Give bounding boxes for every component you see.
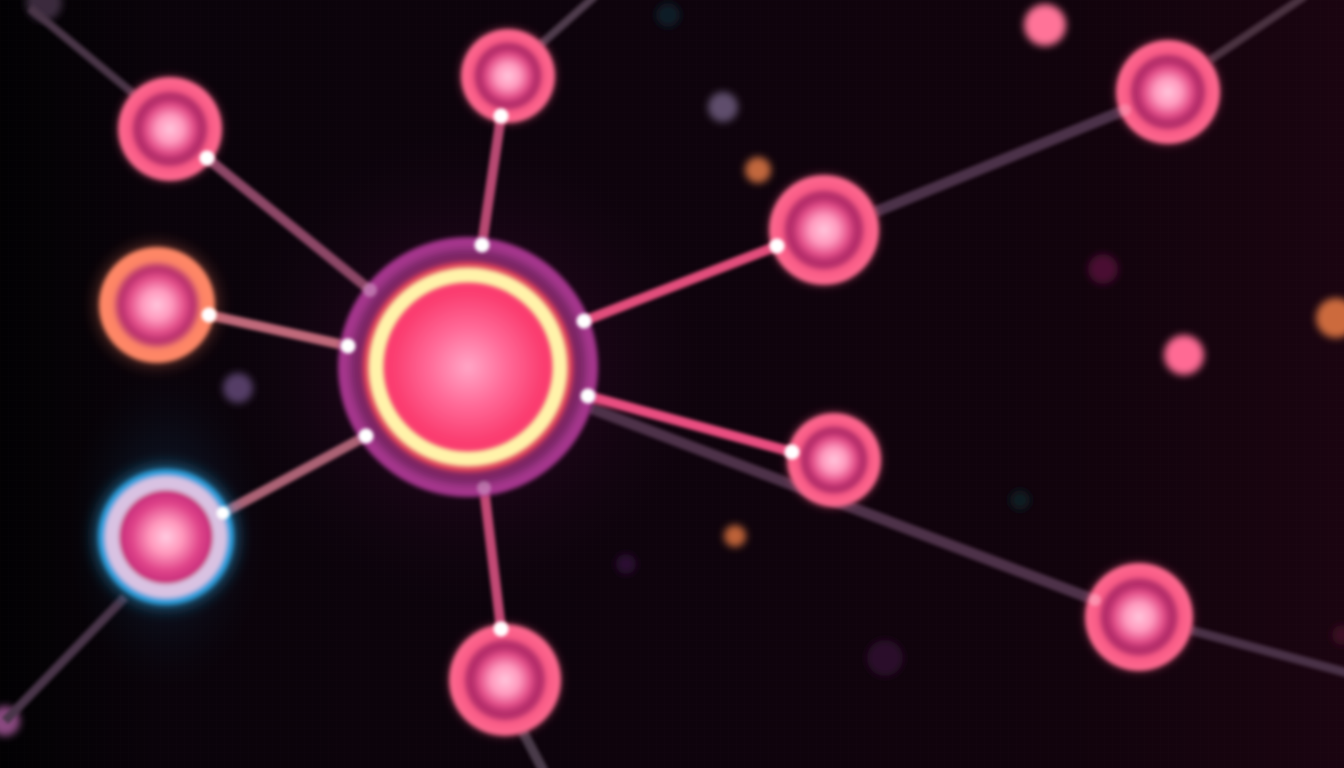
satellite node: orange bbox=[95, 243, 219, 367]
hub yellow ring bbox=[376, 275, 560, 459]
line: blue to hub bbox=[223, 436, 366, 513]
particle: dim teal top bbox=[656, 3, 680, 27]
line: lower right to edge bbox=[1190, 630, 1344, 673]
line: bottom left bbox=[5, 597, 125, 721]
particle: orange lower bbox=[724, 525, 746, 547]
particle: orange right edge bbox=[1316, 298, 1344, 338]
satellite node: upper left bbox=[110, 69, 230, 189]
line: right node to top-right node bbox=[875, 110, 1125, 212]
line: top to hub bbox=[482, 116, 501, 245]
hub node bbox=[338, 237, 598, 497]
satellite node: right upper bbox=[761, 167, 887, 293]
particle: orange upper bbox=[745, 157, 771, 183]
particle: magenta dim bbox=[1088, 254, 1118, 284]
particle: grey bbox=[708, 92, 738, 122]
blue glow behind left node bbox=[66, 370, 266, 690]
hub yellow ring glow bbox=[376, 275, 560, 459]
particle: dim purple bbox=[867, 640, 903, 676]
line: bottom off canvas bbox=[522, 730, 544, 768]
particle: right edge dim bbox=[1332, 625, 1344, 645]
particle: dim purple small bbox=[616, 554, 636, 574]
satellite node: right lower bbox=[779, 405, 889, 515]
satellite node: blue ringed bbox=[94, 465, 238, 609]
line: upper left to hub bbox=[207, 158, 370, 290]
line: bottom to hub bbox=[484, 488, 501, 629]
hub outer purple ring bbox=[338, 237, 598, 497]
satellite node: bottom bbox=[441, 616, 569, 744]
line: right upper to hub bbox=[584, 246, 777, 321]
hub core bbox=[382, 281, 554, 453]
particle: dim teal bbox=[1010, 490, 1030, 510]
particle: bottom left edge bbox=[0, 706, 20, 736]
satellite node: top right bbox=[1108, 32, 1228, 152]
line: top right off canvas bbox=[1210, 0, 1305, 60]
center glow bbox=[228, 127, 708, 607]
particle: top left bbox=[26, 0, 62, 21]
line: hub to lower right node bbox=[590, 408, 1095, 600]
line: far top left bbox=[30, 8, 135, 95]
particle: pink right bbox=[1164, 335, 1204, 375]
particle: grey left bbox=[223, 373, 253, 403]
satellite node: top bbox=[453, 21, 563, 131]
connector dots bbox=[200, 104, 1131, 636]
line: top node off canvas bbox=[540, 0, 595, 45]
particle: pink top right bbox=[1024, 4, 1066, 46]
satellite node: lower right bbox=[1077, 555, 1201, 679]
line: orange to hub bbox=[209, 315, 348, 346]
line: right lower to hub bbox=[588, 396, 792, 452]
